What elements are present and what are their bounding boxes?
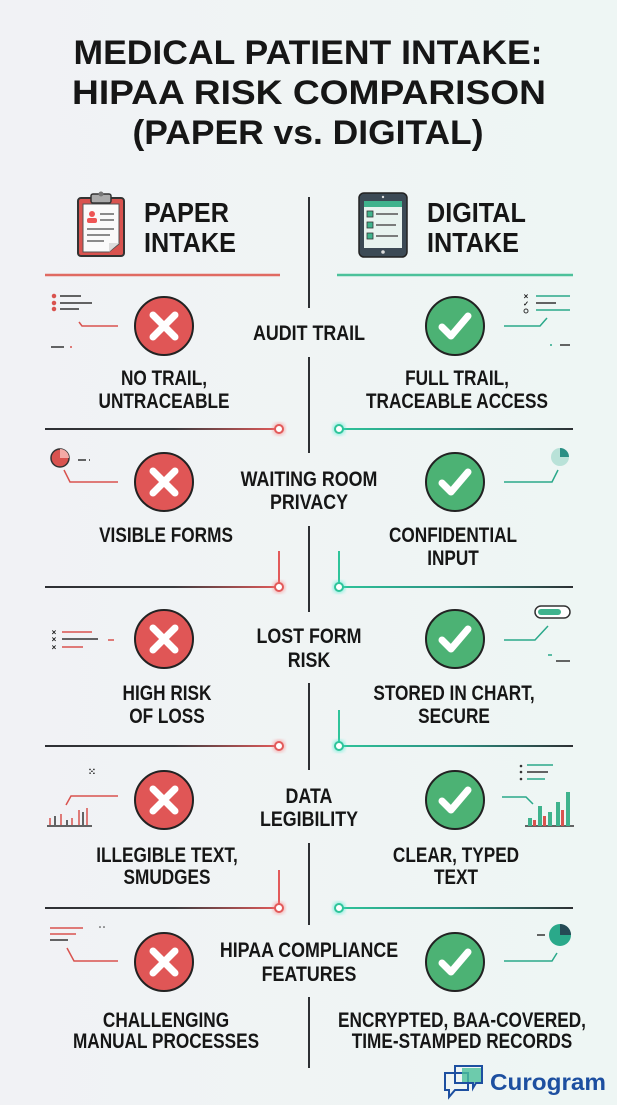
connector 2 bbox=[45, 551, 573, 593]
row 1: audit trail: AUDIT TRAIL bbox=[253, 322, 365, 345]
row 4: data legibility: ILLEGIBLE TEXT, bbox=[96, 845, 238, 867]
row 3: lost form risk: HIGH RISK bbox=[123, 683, 212, 705]
header underlines bbox=[45, 274, 573, 276]
row 1: audit trail bbox=[51, 292, 570, 413]
row 2: waiting room privacy: INPUT bbox=[427, 548, 479, 570]
row 5: hipaa compliance features: FEATURES bbox=[262, 963, 356, 986]
heading: paper intake: PAPER bbox=[144, 197, 229, 228]
row 4: data legibility: SMUDGES bbox=[124, 867, 211, 889]
row 3: lost form risk: RISK bbox=[288, 649, 330, 672]
row 1: audit trail: ✓ bbox=[523, 301, 529, 308]
row 3: lost form risk bbox=[52, 606, 570, 728]
heading: digital intake: INTAKE bbox=[427, 227, 519, 258]
row 2: waiting room privacy: WAITING ROOM bbox=[241, 468, 377, 491]
icon: red x bbox=[135, 933, 193, 991]
heading: digital intake bbox=[427, 197, 526, 258]
title: (PAPER vs. DIGITAL) bbox=[132, 114, 484, 152]
icon: green check bbox=[426, 610, 484, 668]
row 5: hipaa compliance features: MANUAL PROCESSES bbox=[73, 1031, 259, 1053]
row 5: hipaa compliance features: HIPAA COMPLIANCE bbox=[220, 939, 398, 962]
connector 4 bbox=[45, 870, 573, 914]
title: MEDICAL PATIENT INTAKE: bbox=[74, 34, 542, 72]
row 4: data legibility: ⁙ bbox=[88, 767, 96, 778]
icon: red x bbox=[135, 453, 193, 511]
icon: red x bbox=[135, 610, 193, 668]
row 2: waiting room privacy: VISIBLE FORMS bbox=[99, 525, 233, 547]
row 3: lost form risk: SECURE bbox=[418, 706, 490, 728]
row 2: waiting room privacy bbox=[51, 448, 569, 570]
heading: paper intake bbox=[144, 197, 236, 258]
row 4: data legibility: LEGIBILITY bbox=[260, 808, 358, 831]
row 2: waiting room privacy: CONFIDENTIAL bbox=[389, 525, 517, 547]
icon: green check bbox=[426, 453, 484, 511]
row 5: hipaa compliance features: TIME-STAMPED RECORDS bbox=[352, 1031, 572, 1053]
connector 3 bbox=[45, 710, 573, 752]
row 3: lost form risk: OF LOSS bbox=[129, 706, 205, 728]
row 3: lost form risk: LOST FORM bbox=[256, 625, 362, 648]
row 1: audit trail: × bbox=[524, 292, 529, 301]
center divider bbox=[308, 197, 310, 1068]
icon: red x bbox=[135, 297, 193, 355]
row 4: data legibility: CLEAR, TYPED bbox=[393, 845, 519, 867]
row 4: data legibility: TEXT bbox=[434, 867, 478, 889]
heading: paper intake: INTAKE bbox=[144, 227, 236, 258]
row 1: audit trail: FULL TRAIL, bbox=[405, 368, 509, 390]
row 5: hipaa compliance features bbox=[50, 924, 586, 1053]
title bbox=[72, 34, 546, 152]
row 4: data legibility bbox=[47, 765, 574, 889]
title: HIPAA RISK COMPARISON bbox=[72, 74, 546, 112]
row 3: lost form risk: × bbox=[52, 643, 57, 652]
icon: green check bbox=[426, 933, 484, 991]
row 5: hipaa compliance features: ENCRYPTED, BAA-COVERED, bbox=[338, 1010, 586, 1032]
row 1: audit trail: NO TRAIL, bbox=[121, 368, 207, 390]
row 3: lost form risk: STORED IN CHART, bbox=[373, 683, 535, 705]
logo: curogram: Curogram bbox=[490, 1069, 606, 1095]
icon: green check bbox=[426, 771, 484, 829]
logo: curogram bbox=[445, 1066, 606, 1097]
row 5: hipaa compliance features: CHALLENGING bbox=[103, 1010, 229, 1032]
row 3: lost form risk: × bbox=[52, 628, 57, 637]
connector 1 bbox=[45, 423, 573, 435]
icon: green check bbox=[426, 297, 484, 355]
row 1: audit trail: TRACEABLE ACCESS bbox=[366, 391, 548, 413]
row 4: data legibility: DATA bbox=[286, 785, 332, 808]
icon: clipboard bbox=[78, 192, 124, 256]
icon: red x bbox=[135, 771, 193, 829]
row 1: audit trail: UNTRACEABLE bbox=[99, 391, 230, 413]
heading: digital intake: DIGITAL bbox=[427, 197, 526, 228]
row 3: lost form risk: × bbox=[52, 635, 57, 644]
icon: tablet bbox=[359, 193, 407, 257]
row 2: waiting room privacy: PRIVACY bbox=[270, 491, 348, 514]
